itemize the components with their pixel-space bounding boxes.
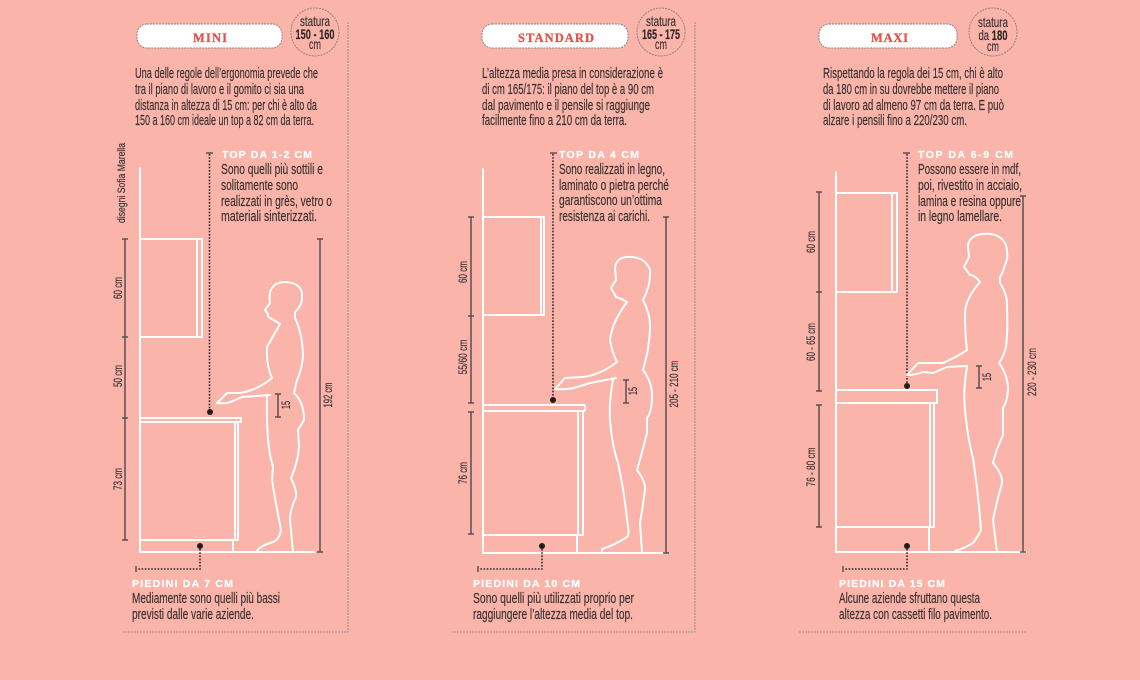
- dimensions: [456, 217, 681, 553]
- top note: lamina e resina oppure: [918, 194, 1021, 210]
- dimensions: 55/60 cm: [456, 339, 470, 374]
- dimensions: 76 - 80 cm: [804, 448, 818, 486]
- badge: statura 150-160 cm: cm: [309, 36, 321, 52]
- feet note: [132, 578, 280, 623]
- intro text: da 180 cm in su dovrebbe mettere il piano: [823, 82, 999, 98]
- dimensions: [804, 192, 1039, 552]
- feet note: [473, 578, 634, 623]
- dimensions: 60 cm: [111, 277, 125, 299]
- top note: resistenza ai carichi.: [559, 209, 650, 225]
- top note: laminato o pietra perché: [559, 178, 669, 194]
- top note: Sono realizzati in legno,: [559, 162, 665, 178]
- person: [555, 257, 652, 552]
- kitchen units: [483, 169, 665, 553]
- intro text: distanza in altezza di 15 cm: per chi è alto da: [135, 98, 318, 114]
- top note: [559, 149, 669, 225]
- top note: materiali sinterizzati.: [221, 209, 317, 225]
- heading: standard: STANDARD: [518, 31, 594, 45]
- badge: statura 150-160 cm: statura: [300, 13, 330, 29]
- badge: statura 165-175 cm: cm: [655, 36, 667, 52]
- top note: [918, 149, 1022, 225]
- intro text: tra il piano di lavoro e il gomito ci sia una: [135, 82, 305, 98]
- badge: statura da 180 cm: da 180: [978, 27, 1008, 43]
- feet leader: [136, 543, 203, 572]
- dimensions: 60 cm: [804, 231, 818, 253]
- panel: standard: [452, 8, 695, 632]
- badge: statura da 180 cm: cm: [987, 38, 999, 54]
- feet note: PIEDINI DA 15 CM: [839, 578, 945, 590]
- intro text: L’altezza media presa in considerazione è: [482, 66, 663, 82]
- dimensions: 15: [279, 401, 293, 409]
- feet note: raggiungere l’altezza media del top.: [473, 607, 633, 623]
- top note: in legno lamellare.: [918, 209, 1002, 225]
- dimensions: 15: [626, 387, 640, 395]
- badge: statura 165-175 cm: [637, 8, 685, 56]
- panel: maxi: [799, 8, 1039, 632]
- heading: mini: [137, 24, 282, 48]
- feet note: previsti dalle varie aziende.: [132, 607, 254, 623]
- feet leader: [843, 543, 910, 572]
- top note: garantiscono un’ottima: [559, 193, 663, 209]
- top note: TOP DA 6-9 CM: [918, 149, 1013, 161]
- person: [907, 234, 1008, 552]
- intro text: Una delle regole dell’ergonomia prevede che: [135, 66, 318, 82]
- feet note: Sono quelli più utilizzati proprio per: [473, 591, 634, 607]
- dimensions: 50 cm: [111, 365, 125, 387]
- dimensions: 192 cm: [321, 382, 335, 408]
- kitchen units: [836, 172, 1026, 552]
- top leader: [550, 153, 557, 403]
- panel: mini: [111, 8, 348, 632]
- kitchen units: [140, 168, 314, 552]
- top note: Sono quelli più sottili e: [221, 162, 323, 178]
- feet note: Mediamente sono quelli più bassi: [132, 591, 280, 607]
- top note: solitamente sono: [221, 178, 298, 194]
- intro text: Rispettando la regola dei 15 cm, chi è alto: [823, 66, 1003, 82]
- intro text: [482, 66, 663, 129]
- intro text: facilmente fino a 210 cm da terra.: [482, 113, 627, 129]
- credit: disegni Sofia Marella: [116, 142, 128, 223]
- badge: statura 150-160 cm: [291, 8, 339, 56]
- top leader: [903, 153, 910, 389]
- heading: standard: [482, 24, 628, 48]
- feet note: altezza con cassetti filo pavimento.: [839, 607, 992, 623]
- heading: maxi: MAXI: [871, 31, 908, 45]
- intro text: alzare i pensili fino a 220/230 cm.: [823, 113, 967, 129]
- top note: TOP DA 1-2 CM: [222, 149, 312, 161]
- feet note: PIEDINI DA 10 CM: [473, 578, 580, 590]
- dimensions: 220 - 230 cm: [1025, 348, 1039, 396]
- top note: [221, 149, 332, 225]
- badge: statura da 180 cm: [969, 8, 1017, 56]
- feet note: [839, 578, 992, 623]
- badge: statura da 180 cm: statura: [978, 14, 1008, 30]
- feet note: PIEDINI DA 7 CM: [132, 578, 233, 590]
- top note: poi, rivestito in acciaio,: [918, 178, 1022, 194]
- badge: statura 165-175 cm: 165 - 175: [642, 26, 680, 42]
- top leader: [206, 153, 213, 415]
- top note: realizzati in grès, vetro o: [221, 194, 332, 210]
- badge: statura 150-160 cm: 150 - 160: [296, 26, 335, 42]
- intro text: [823, 66, 1004, 129]
- feet note: Alcune aziende sfruttano questa: [839, 591, 981, 607]
- intro text: [135, 66, 318, 129]
- intro text: dal pavimento e il pensile si raggiunge: [482, 98, 650, 114]
- badge: statura 165-175 cm: statura: [646, 13, 676, 29]
- dimensions: [111, 239, 335, 552]
- dimensions: 73 cm: [111, 468, 125, 490]
- intro text: di cm 165/175: il piano del top è a 90 cm: [482, 82, 654, 98]
- dimensions: 60 - 65 cm: [804, 323, 818, 361]
- top note: Possono essere in mdf,: [918, 162, 1021, 178]
- heading: mini: MINI: [193, 31, 227, 45]
- dimensions: 15: [980, 373, 994, 381]
- top note: TOP DA 4 CM: [559, 149, 639, 161]
- intro text: 150 a 160 cm ideale un top a 82 cm da terra.: [135, 113, 314, 129]
- dimensions: 76 cm: [456, 462, 470, 484]
- feet leader: [478, 543, 545, 572]
- dimensions: 60 cm: [456, 261, 470, 283]
- person: [217, 282, 304, 552]
- dimensions: 205 - 210 cm: [667, 360, 681, 408]
- heading: maxi: [819, 24, 957, 48]
- intro text: di lavoro ad almeno 97 cm da terra. E può: [823, 98, 1004, 114]
